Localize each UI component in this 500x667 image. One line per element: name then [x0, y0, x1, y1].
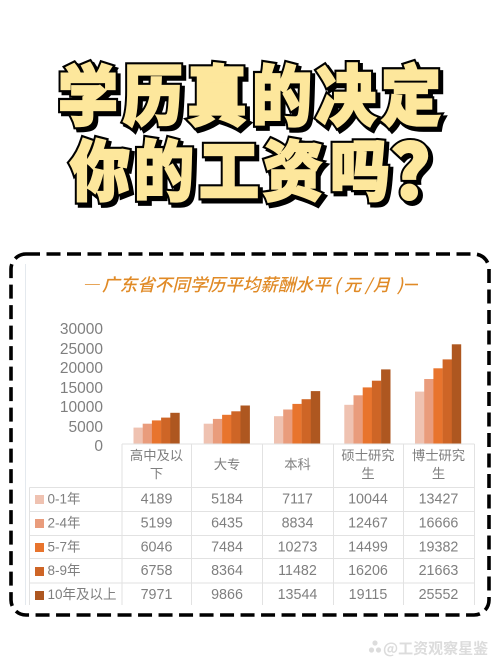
table values: 13544 [278, 587, 317, 603]
table values: 7117 [282, 492, 313, 508]
y axis labels: 25000 [60, 341, 103, 358]
legend labels: 8-9年 [48, 563, 81, 578]
table column headers: 高中及以 [130, 447, 183, 463]
data table [30, 444, 474, 605]
table values: 7484 [211, 540, 243, 556]
table column headers: 生 [361, 466, 375, 481]
table grid [30, 444, 474, 605]
y axis labels: 30000 [60, 321, 103, 338]
table column headers: 大专 [214, 457, 240, 472]
table values: 6435 [211, 516, 243, 532]
y axis labels: 10000 [60, 399, 103, 416]
table values: 6046 [141, 540, 172, 556]
table values: 6758 [141, 563, 172, 579]
chart title: —广东省不同学历平均薪酬水平 [82, 272, 333, 297]
panel inner edge [24, 264, 26, 605]
watermark icon [369, 640, 381, 653]
legend labels: 5-7年 [48, 540, 81, 554]
bar chart [134, 344, 461, 444]
table column headers: 硕士研究 [341, 448, 395, 463]
table values: 11482 [278, 563, 317, 579]
watermark [369, 638, 488, 658]
table values [141, 492, 458, 603]
title line 1: 学历真的决定 [61, 47, 444, 143]
title question mark: ？ [391, 111, 467, 221]
table values: 9866 [211, 587, 243, 603]
title line 1: 学历真的决定 [58, 45, 441, 140]
table values: 19115 [349, 587, 387, 603]
table values: 25552 [419, 587, 458, 603]
table column headers [130, 447, 465, 481]
title question mark: ？ [394, 114, 470, 224]
y axis labels: 5000 [69, 419, 103, 436]
watermark text: @工资观察星鉴 [383, 638, 488, 658]
y axis labels: 0 [94, 438, 103, 455]
bars: 博士研究生 [415, 344, 461, 444]
table values: 19382 [419, 540, 458, 556]
title question mark: ？ [391, 111, 467, 221]
y axis labels: 20000 [60, 360, 103, 377]
table values: 16206 [348, 563, 388, 579]
table values: 21663 [419, 563, 458, 579]
legend labels [48, 492, 117, 602]
table values: 5184 [211, 492, 243, 508]
table column headers: 下 [150, 466, 163, 481]
table values: 10044 [348, 492, 388, 508]
table values: 4189 [141, 492, 172, 508]
title line 2: 你的工资吗 [70, 120, 390, 215]
table column headers: 本科 [284, 457, 311, 472]
table values: 12467 [348, 516, 388, 532]
legend labels: 10年及以上 [48, 587, 117, 602]
table values: 16666 [419, 516, 458, 532]
panel: chart card [11, 254, 489, 615]
table values: 8834 [282, 516, 313, 532]
legend labels: 2-4年 [48, 516, 81, 530]
legend swatches [35, 495, 44, 600]
y axis labels: 15000 [60, 380, 103, 397]
table values: 14499 [348, 540, 388, 556]
table column headers: 生 [432, 466, 445, 481]
y axis labels [60, 321, 103, 455]
title line 1: 学历真的决定 [58, 45, 441, 140]
bars: 大专 [204, 406, 250, 444]
title line 2: 你的工资吗 [73, 122, 393, 218]
table column headers: 博士研究 [412, 448, 465, 463]
dashed border [11, 254, 489, 615]
table values: 7971 [141, 587, 172, 603]
title [58, 45, 470, 224]
bars: 硕士研究生 [344, 369, 390, 444]
title line 2: 你的工资吗 [70, 120, 390, 215]
chart title: (元/月) [334, 271, 404, 296]
table values: 10273 [278, 540, 317, 556]
table values: 13427 [419, 492, 458, 508]
legend labels: 0-1年 [48, 492, 81, 506]
bars: 本科 [274, 391, 320, 444]
table values: 8364 [211, 563, 243, 579]
table values: 5199 [141, 516, 172, 532]
bars: 高中及以下 [134, 413, 180, 444]
